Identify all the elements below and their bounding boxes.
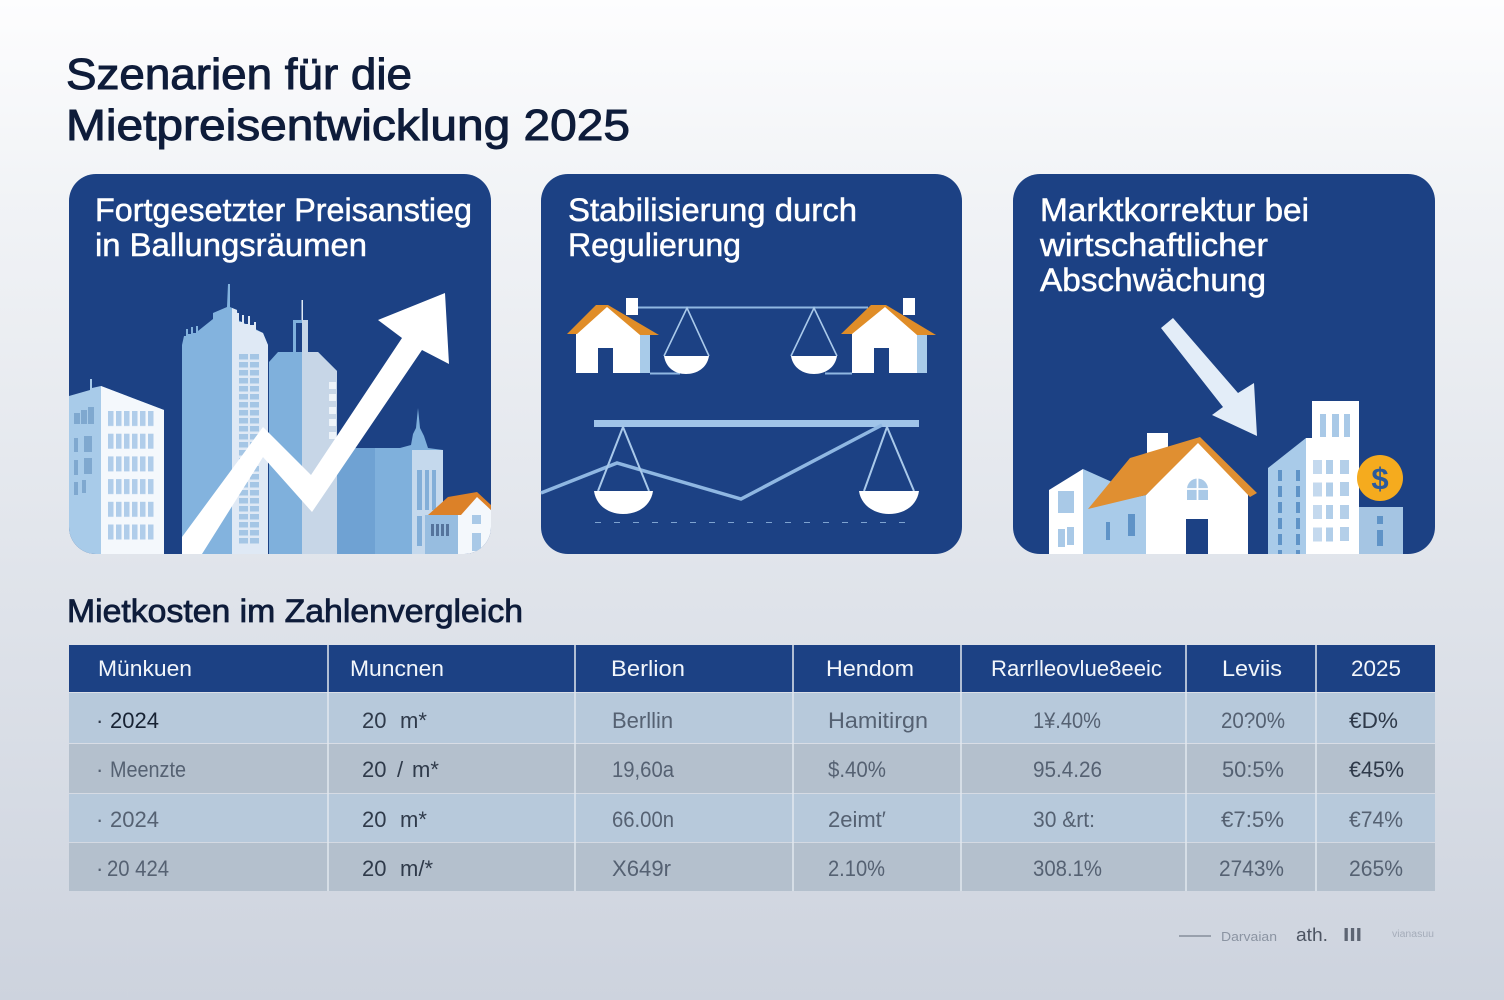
table row 2: m* xyxy=(412,757,439,782)
panel: Fortgesetzter Preisanstieg xyxy=(69,174,491,554)
table row 4: 308.1% xyxy=(1033,856,1102,881)
panel heading: Marktkorrektur bei xyxy=(1040,192,1309,228)
icon: coin xyxy=(1357,455,1403,501)
table row 3: 66.00n xyxy=(612,807,674,832)
title: Szenarien für die xyxy=(66,50,412,99)
title xyxy=(66,50,630,150)
table header: Muncnen xyxy=(350,656,444,681)
table row 4: m/* xyxy=(400,856,433,881)
table header: Münkuen xyxy=(98,656,192,681)
table row 4: · xyxy=(96,856,103,881)
table row 2: 50:5% xyxy=(1222,757,1284,782)
table row 1: 1¥.40% xyxy=(1033,708,1101,733)
arrow: falling xyxy=(1161,318,1257,436)
table row 3: €74% xyxy=(1349,807,1403,832)
section heading: Mietkosten im Zahlenvergleich xyxy=(67,593,523,629)
table row 4 xyxy=(69,843,1435,891)
table row 3 xyxy=(69,794,1435,842)
table header: Hendom xyxy=(826,656,914,681)
footer legend: Darvaian xyxy=(1221,929,1277,944)
table row 2: Meenzte xyxy=(110,757,186,782)
footer legend xyxy=(1179,925,1434,945)
panel heading xyxy=(95,192,472,263)
illustration: lower scales with trend line xyxy=(541,420,919,522)
table row 1: m* xyxy=(400,708,427,733)
table row 2: 19,60a xyxy=(612,757,675,782)
panel: Stabilisierung durch Regulierung xyxy=(541,174,962,554)
illustration: skyline with rising arrow xyxy=(69,284,491,554)
table header xyxy=(69,645,1435,692)
table row 3: 2eimt′ xyxy=(828,807,886,832)
panel heading: in Ballungsräumen xyxy=(95,227,367,263)
footer legend: III xyxy=(1343,925,1362,945)
table header: Rarrlleovlue8eeic xyxy=(991,656,1162,681)
panel heading: wirtschaftlicher xyxy=(1039,227,1268,263)
table row 4: 2743% xyxy=(1219,856,1284,881)
table header: 2025 xyxy=(1351,656,1401,681)
table row 1: 20 xyxy=(362,708,386,733)
table row 3: 2024 xyxy=(110,807,159,832)
icon: coin: $ xyxy=(1371,461,1389,496)
panel: Marktkorrektur xyxy=(1013,174,1435,554)
table row 1 xyxy=(69,693,1435,743)
table row 4: 2.10% xyxy=(828,856,885,881)
comparison table xyxy=(69,645,1435,891)
table row 3: 20 xyxy=(362,807,386,832)
table row 2: 95.4.26 xyxy=(1033,757,1102,782)
illustration: houses and buildings xyxy=(1049,401,1403,554)
table row 1: Berllin xyxy=(612,708,673,733)
panel heading xyxy=(1039,192,1309,298)
panel heading: Regulierung xyxy=(568,227,741,263)
table row 2: $.40% xyxy=(828,757,886,782)
panel heading: Fortgesetzter Preisanstieg xyxy=(95,192,472,228)
panel heading xyxy=(568,192,857,263)
table row 4: 265% xyxy=(1349,856,1403,881)
table row 1: Hamitirgn xyxy=(828,708,928,733)
table row 3: 30 &rt: xyxy=(1033,807,1095,832)
table row 3: · xyxy=(96,807,103,832)
table row 3: m* xyxy=(400,807,427,832)
table row 1: 2024 xyxy=(110,708,159,733)
table row 1: €D% xyxy=(1349,708,1398,733)
table row 1: 20?0% xyxy=(1221,708,1285,733)
icon: left house xyxy=(567,298,659,373)
table row 2: €45% xyxy=(1349,757,1404,782)
table row 4: X649r xyxy=(612,856,671,881)
panel heading: Stabilisierung durch xyxy=(568,192,857,228)
table row 2: 20 xyxy=(362,757,386,782)
table row 2: · xyxy=(96,757,103,782)
table row 4: 20 xyxy=(362,856,386,881)
panel heading: Abschwächung xyxy=(1040,262,1266,298)
title: Mietpreisentwicklung 2025 xyxy=(66,101,630,150)
table header: Leviis xyxy=(1222,656,1282,681)
table row 2 xyxy=(69,744,1435,793)
table row 2: / xyxy=(397,757,404,782)
table header: Berlion xyxy=(611,656,685,681)
icon: right house xyxy=(841,298,936,373)
footer legend: ath. xyxy=(1296,925,1328,945)
table row 4: 20 424 xyxy=(107,856,169,881)
footer legend: vianasuu xyxy=(1392,929,1434,940)
table row 1: · xyxy=(96,708,103,733)
table row 3: €7:5% xyxy=(1221,807,1284,832)
illustration: upper scales with two houses xyxy=(567,298,936,374)
